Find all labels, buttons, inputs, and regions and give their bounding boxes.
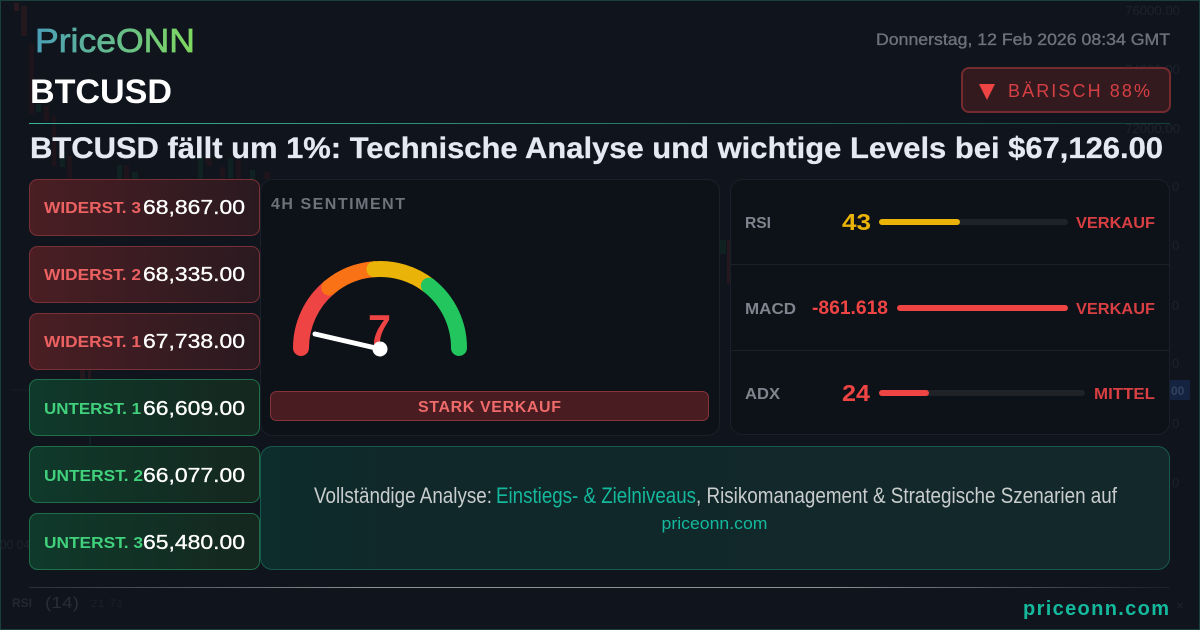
- indicator: MACD: -861.618: [812, 298, 888, 319]
- indicator: MACD: VERKAUF: [1076, 301, 1155, 318]
- faint axis labels: ×: [1176, 597, 1184, 613]
- logo: PriceONN: [35, 22, 195, 59]
- indicator: MACD: [745, 298, 1155, 319]
- level: resistance 3: WIDERST. 3: [44, 200, 141, 217]
- level: support 2: 66,077.00: [143, 465, 245, 487]
- indicator: RSI: RSI: [745, 215, 771, 232]
- heading: 4H sentiment: 4H SENTIMENT: [271, 196, 405, 213]
- faint axis labels: 00: [1171, 384, 1185, 398]
- indicator: ADX: ADX: [745, 386, 780, 403]
- gauge: [301, 269, 459, 356]
- level: resistance 1: 67,738.00: [143, 331, 245, 353]
- faint axis labels: 74000.00: [1125, 62, 1180, 77]
- call to action text: priceonn.com: [662, 514, 768, 533]
- level: resistance 1: WIDERST. 1: [44, 334, 141, 351]
- indicator: ADX: MITTEL: [1094, 386, 1155, 403]
- gauge: 7: [368, 306, 391, 353]
- level: support 1: UNTERST. 1: [44, 401, 141, 418]
- level: resistance 2: [30, 246, 260, 302]
- level: support 2: UNTERST. 2: [44, 468, 143, 485]
- sentiment badge: BÄRISCH 88%: [1008, 81, 1150, 101]
- indicator: RSI: 43: [842, 209, 871, 235]
- call to action text: [314, 483, 1118, 533]
- level: resistance 2: 68,335.00: [143, 264, 245, 286]
- faint axis labels: 21 71: [91, 598, 123, 610]
- faint axis labels: 0: [1172, 416, 1179, 431]
- faint axis labels: 00 04: [0, 537, 30, 552]
- indicator: ADX: 24: [842, 380, 870, 406]
- level: resistance 3: [30, 180, 260, 236]
- faint axis labels: 0: [1172, 179, 1179, 194]
- level: resistance 1: [30, 314, 260, 370]
- symbol heading: BTCUSD: [30, 73, 172, 111]
- sentiment label: [270, 392, 708, 420]
- level: support 3: UNTERST. 3: [44, 535, 143, 552]
- indicator: RSI: [745, 209, 1155, 235]
- footer url: priceonn.com: [1023, 598, 1169, 620]
- sentiment label: STARK VERKAUF: [418, 399, 561, 416]
- date: Donnerstag, 12 Feb 2026 08:34 GMT: [876, 31, 1170, 49]
- header divider: [29, 123, 1170, 124]
- faint axis labels: RSI: [12, 596, 32, 610]
- level: resistance 2: WIDERST. 2: [44, 267, 141, 284]
- faint axis labels: 0: [1172, 475, 1179, 490]
- panel: 4H sentiment: [260, 180, 720, 436]
- indicator: ADX: [745, 380, 1155, 406]
- icon: down triangle: [979, 84, 995, 100]
- call to action text: , Risikomanagement & Strategische Szenarien auf: [696, 483, 1118, 508]
- faint axis labels: 0: [1172, 298, 1179, 313]
- level: support 3: [30, 514, 260, 570]
- faint axis labels: 76000.00: [1125, 3, 1180, 18]
- faint axis labels: 72000.00: [1125, 121, 1180, 136]
- footer divider: [29, 587, 1170, 588]
- panel: call to action: [260, 446, 1170, 570]
- indicator: MACD: MACD: [745, 301, 796, 318]
- level: support 1: [30, 380, 260, 436]
- faint axis labels: 0: [1172, 356, 1179, 371]
- level: support 1: 66,609.00: [143, 398, 245, 420]
- call to action text: Vollständige Analyse:: [314, 483, 492, 508]
- title: BTCUSD fällt um 1%: Technische Analyse und wichtige Levels bei $67,126.00: [30, 132, 1163, 165]
- faint axis labels: (14): [45, 595, 79, 612]
- sentiment badge: [962, 68, 1170, 112]
- level: support 2: [30, 446, 260, 502]
- panel: indicators: [730, 180, 1170, 434]
- level: support 3: 65,480.00: [143, 532, 245, 554]
- faint chart candles: [12, 3, 730, 446]
- panel: price levels: [30, 180, 260, 570]
- indicator: RSI: VERKAUF: [1076, 215, 1155, 232]
- level: resistance 3: 68,867.00: [143, 197, 245, 219]
- call to action text: Einstiegs- & Zielniveaus: [496, 483, 696, 508]
- faint axis labels: 0: [1172, 238, 1179, 253]
